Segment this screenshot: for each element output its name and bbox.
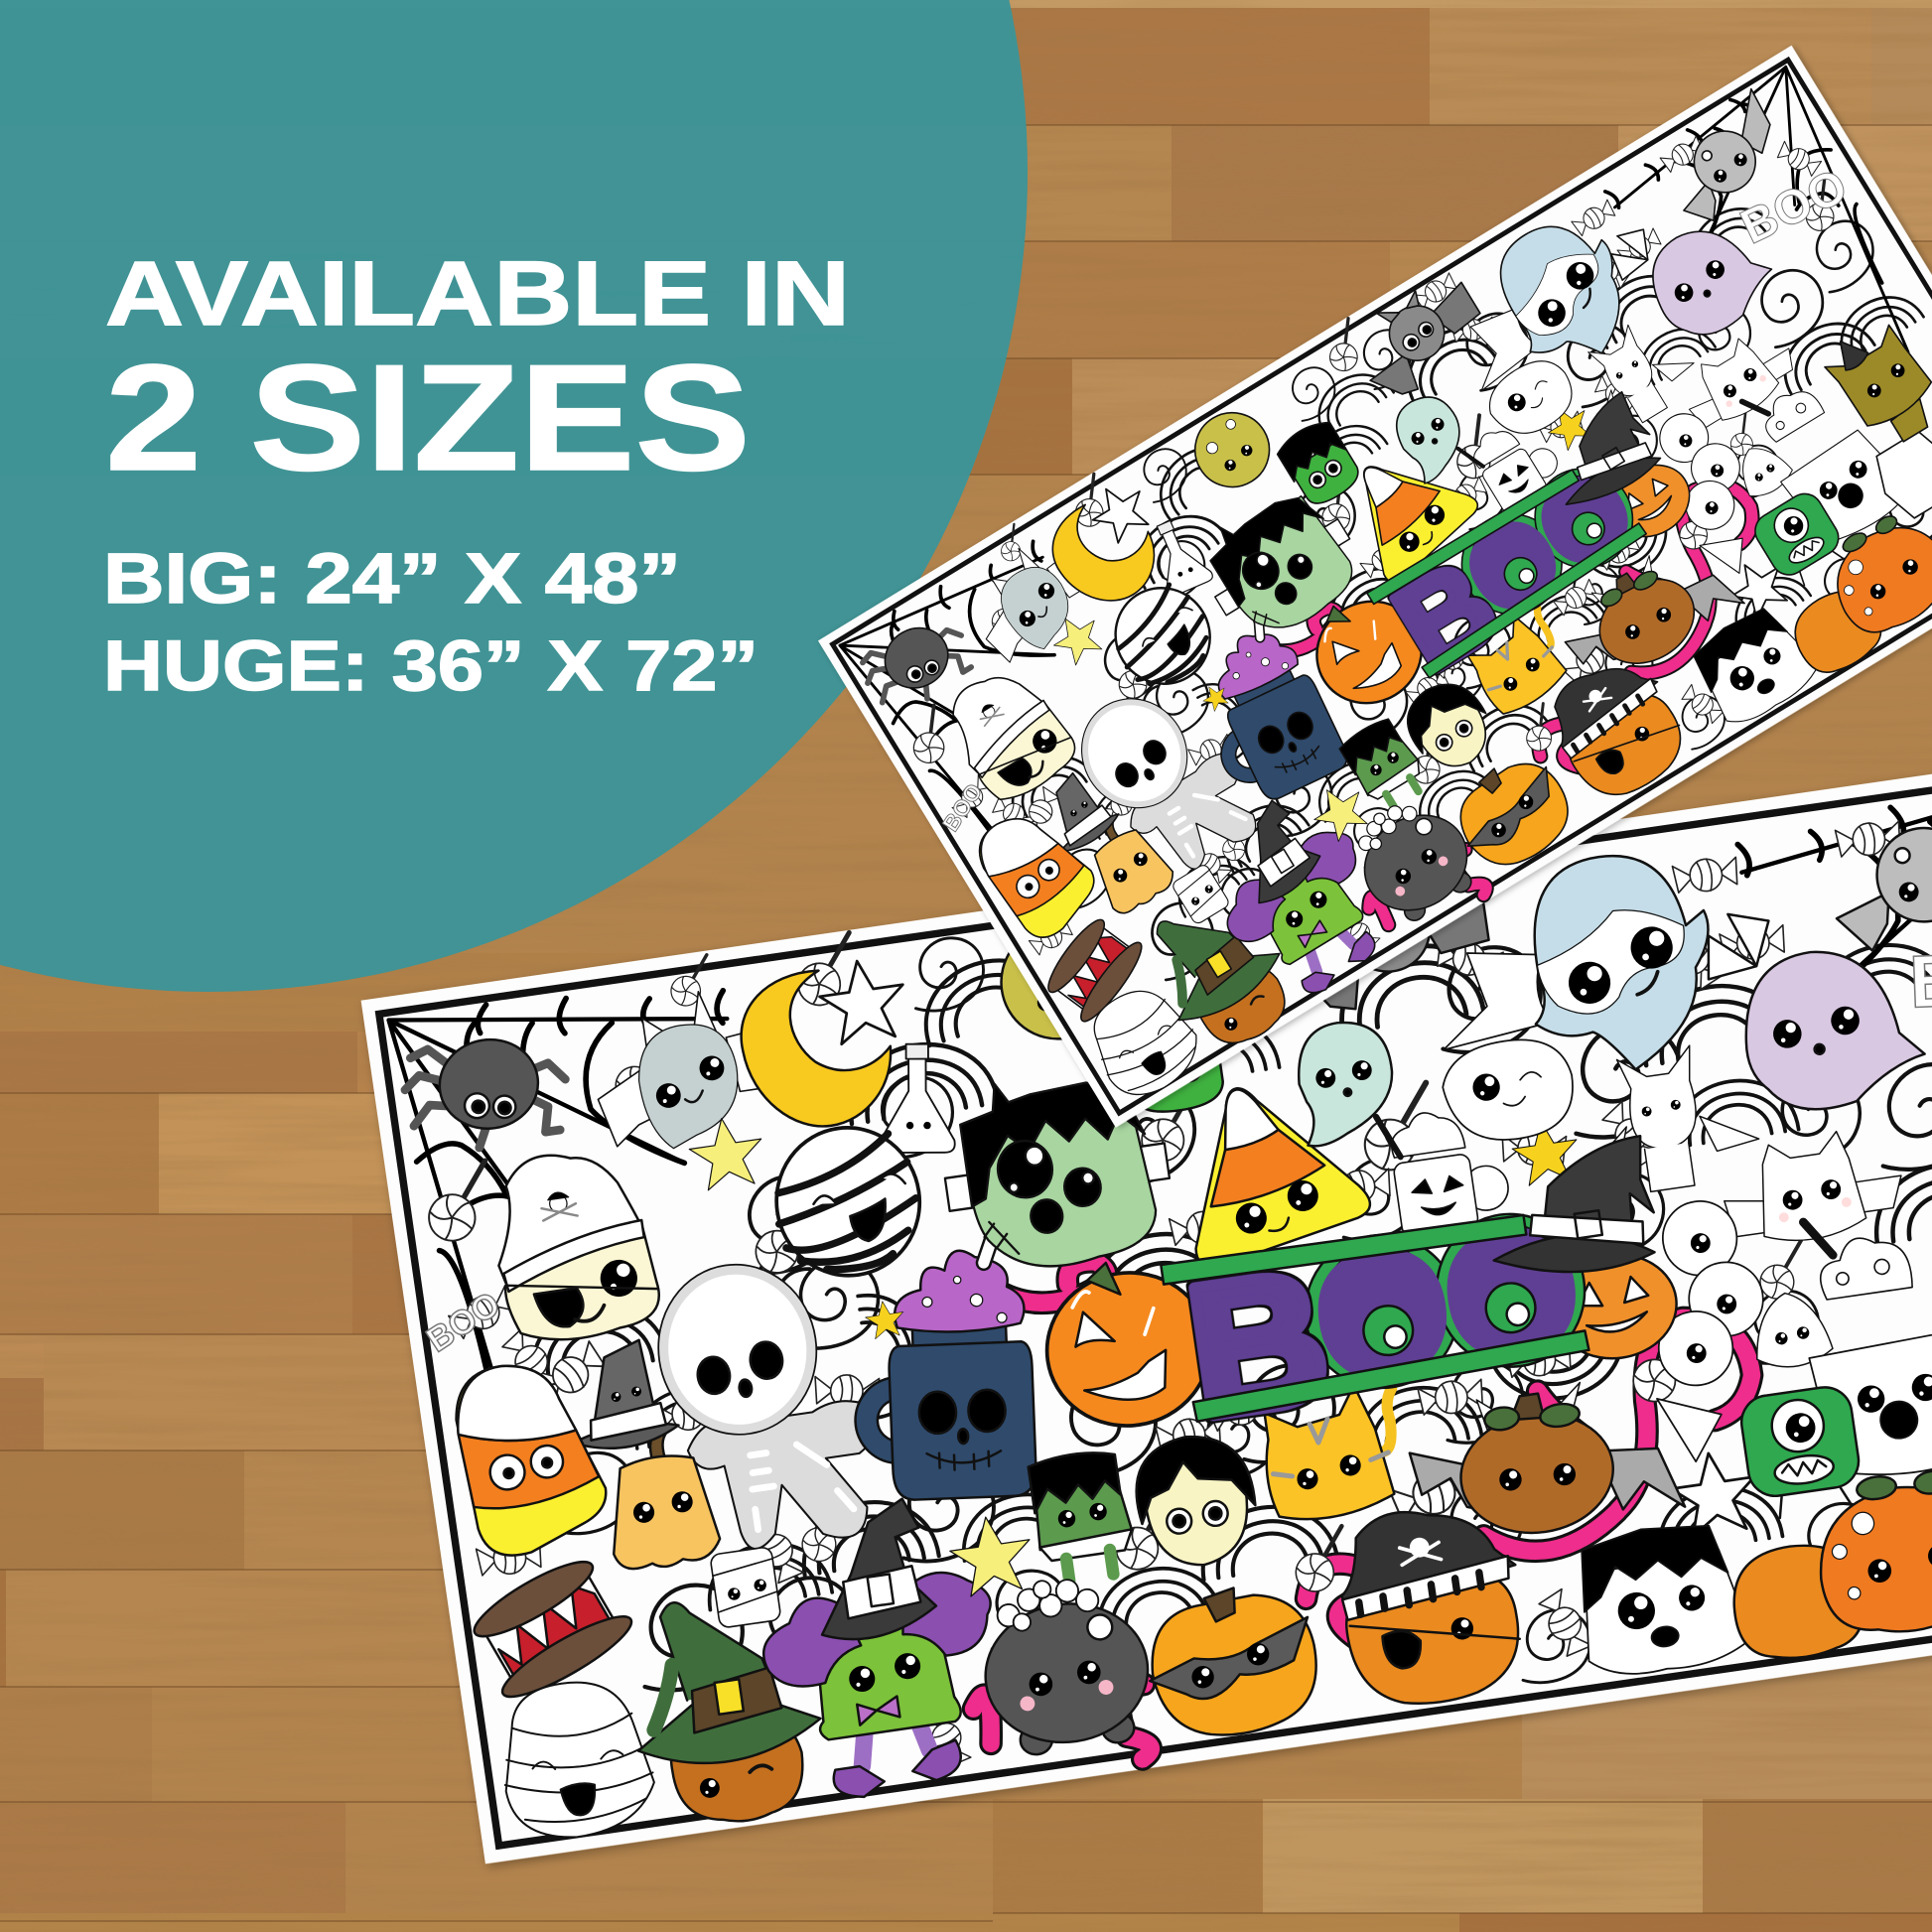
outline marshmallow bat [1717, 1123, 1908, 1251]
grey bat with big eyes [1282, 857, 1496, 1017]
outline star right [1667, 1448, 1761, 1539]
small jack-o-lantern [1544, 1224, 1684, 1366]
small poster border [833, 60, 1932, 1113]
boo green bars [1161, 1206, 1591, 1424]
grey bat top right [1822, 788, 1932, 955]
green-topped jack-o-lantern [1035, 1250, 1219, 1437]
outline ghost face [1808, 1328, 1932, 1485]
poster artwork [371, 758, 1932, 1857]
small poster [818, 46, 1932, 1128]
small boo green rings [1443, 451, 1652, 632]
outline milkshake [1803, 1208, 1913, 1302]
grey mini witch hat [560, 1336, 681, 1454]
crescent moon [733, 961, 900, 1137]
small boo letters oo: O [1440, 485, 1586, 644]
pale star left [686, 1113, 767, 1192]
grey bat ghost [585, 979, 808, 1158]
green one-eyed monster [1738, 1384, 1865, 1521]
pale blue ghost [1513, 843, 1726, 1082]
big poster [361, 752, 1932, 1863]
spider [399, 1030, 573, 1157]
small green frankenstein [1117, 990, 1226, 1117]
small gold star [864, 1299, 906, 1340]
small outline ghost [1748, 1288, 1835, 1372]
white mug outline [1376, 1100, 1513, 1239]
small boo green bars [1367, 453, 1651, 682]
cauldron with bubbles [973, 1568, 1158, 1760]
boo word [1174, 1184, 1597, 1456]
eyeball ice cream cone [1630, 1194, 1785, 1465]
blue mug with purple topping [858, 1187, 1036, 1501]
small boo letter b: B [1373, 534, 1520, 697]
small boo logo [1359, 438, 1667, 703]
small poster sheet [818, 46, 1932, 1128]
masked pumpkin [1139, 1578, 1325, 1745]
mummy ball [766, 1118, 929, 1285]
heading text block [103, 243, 850, 706]
orange tabby cat [1256, 1380, 1409, 1525]
boo green rings [1295, 1204, 1595, 1398]
huge size label: HUGE: 36” X 72” [103, 627, 759, 706]
background swirls [480, 779, 1932, 1819]
big poster border [379, 769, 1932, 1846]
pale star bottom [946, 1511, 1036, 1598]
mini mummy cube [710, 1547, 781, 1628]
brown bat pumpkin [1403, 1370, 1686, 1550]
candies and lollipops [397, 761, 1932, 1832]
pumpkin with green witch hat [619, 1585, 833, 1835]
small orange pumpkin [1726, 1537, 1869, 1666]
tiny boo text left: BOO [420, 1285, 506, 1360]
boo eyeball centers [1359, 1280, 1539, 1358]
small poster witch hat [1531, 391, 1666, 518]
red toothed hat [461, 1547, 639, 1709]
pink swirl ribbons [912, 1171, 1794, 1782]
boo letters oo: O [1429, 1184, 1594, 1402]
potion flask [880, 1044, 955, 1153]
teal circle panel [0, 0, 1028, 992]
lilac ghost with bow [1700, 890, 1930, 1123]
left candy corn [450, 1354, 614, 1561]
pirate head [484, 1143, 664, 1348]
gold star near boo [1509, 1117, 1582, 1187]
pink swirl ribbons fill [912, 1171, 1794, 1782]
big poster sheet [361, 752, 1932, 1863]
spider web top left [388, 971, 787, 1484]
spider web top right [1734, 777, 1932, 1291]
heading line one: AVAILABLE IN [105, 243, 850, 345]
small large outline boo text right: BOO [1732, 159, 1856, 254]
boo letter b: B [1176, 1230, 1340, 1456]
mint ghost [1292, 1016, 1401, 1148]
outline bat cat [1568, 1037, 1764, 1201]
big size label: BIG: 24” X 48” [103, 540, 681, 619]
bottom left mummy [492, 1673, 660, 1846]
heading line two: 2 SIZES [105, 334, 751, 502]
big candy corn [1173, 1072, 1376, 1269]
yellow pumpkin [597, 1423, 723, 1574]
olive moon face [994, 918, 1122, 1046]
pirate pumpkin [1331, 1497, 1533, 1714]
outline frankenstein [1572, 1516, 1755, 1681]
witch hat on boo [1479, 1136, 1661, 1285]
vampire head [1129, 1429, 1263, 1573]
outline star [815, 955, 910, 1046]
skull [647, 1254, 828, 1445]
small boo word [1369, 440, 1665, 697]
small frankenstein with feet [1028, 1448, 1138, 1585]
small boo eyeball centers [1497, 506, 1612, 596]
white witch ghost [1425, 941, 1580, 1149]
boo logo [1158, 1184, 1601, 1459]
green witch [745, 1488, 1016, 1808]
small tiny boo text left: BOO [937, 778, 987, 836]
small poster artwork [825, 56, 1932, 1121]
skeleton gingerbread body [684, 1397, 892, 1558]
big orange spotted pumpkin [1808, 1461, 1932, 1643]
frankenstein head [932, 1061, 1179, 1281]
small boo letters oo: O [1512, 440, 1658, 599]
boo letters oo: O [1300, 1205, 1465, 1423]
